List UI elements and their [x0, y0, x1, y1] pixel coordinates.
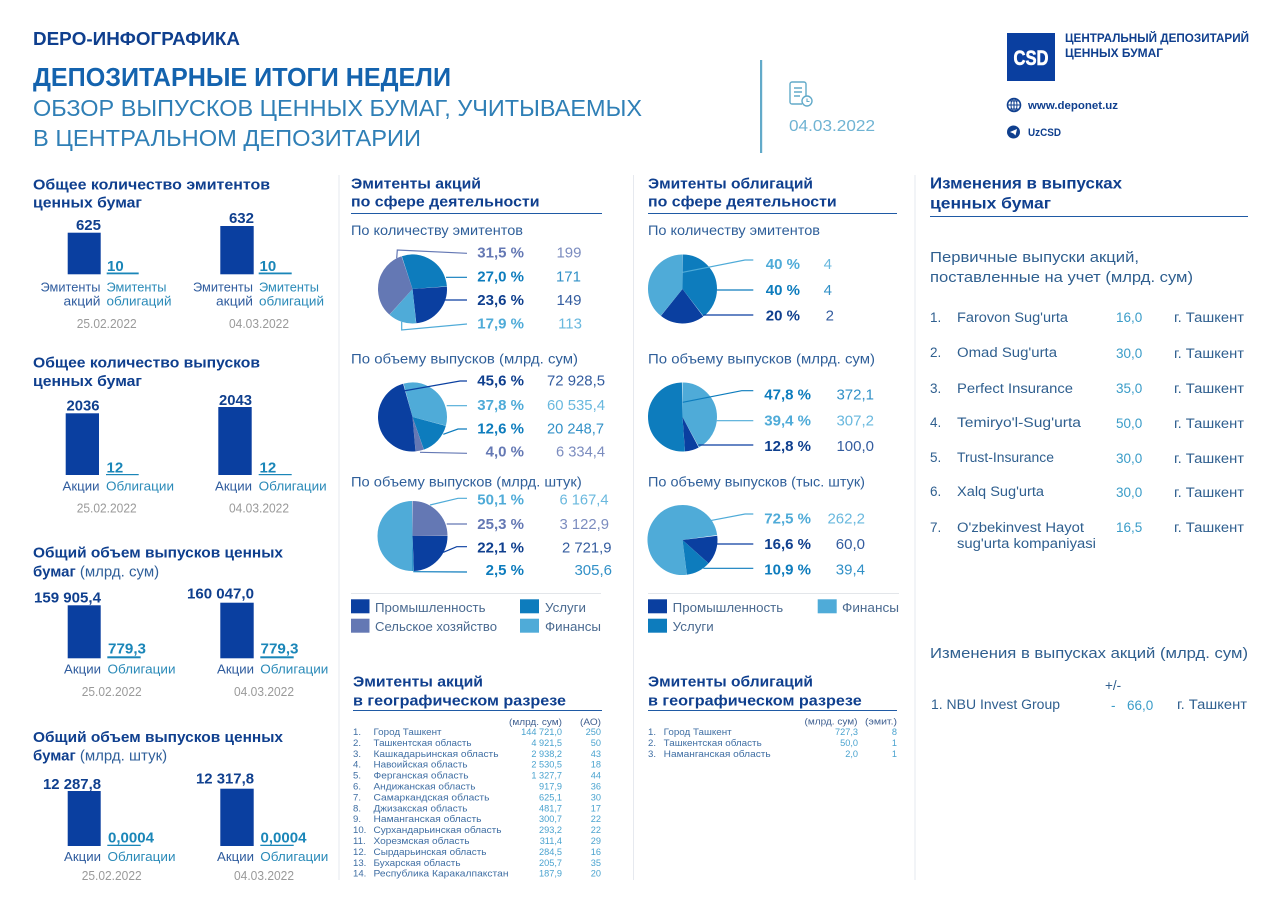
list: primary issues: sug'urta kompaniyasi: [957, 536, 1096, 551]
table: regions: Ташкентская область: [664, 738, 762, 749]
bar chart 25.02.2022: облигаций: [106, 294, 172, 309]
list: stock issue changes: +/-: [1105, 678, 1121, 693]
heading: [351, 175, 602, 214]
panel: changes in issues: [930, 176, 1248, 713]
values: bonds by issuer count: 20 %: [766, 308, 800, 325]
bar chart 25.02.2022: Акции: [64, 661, 101, 676]
table: regions: 1.: [353, 727, 361, 738]
table: regions: Кашкадарьинская область: [374, 749, 498, 760]
subheading: by issuer count: По количеству эмитентов: [648, 222, 820, 238]
bar chart 04.03.2022: 0,0004: [260, 829, 307, 846]
values: stocks by volume in sum: 6 334,4: [556, 444, 605, 461]
header: title block: ДЕПОЗИТАРНЫЕ ИТОГИ НЕДЕЛИ: [33, 62, 451, 92]
list: stock issue changes: [931, 678, 1247, 713]
bar chart 25.02.2022: Облигации: [108, 849, 176, 864]
table: regions: Город Ташкент: [374, 727, 442, 738]
bar chart 25.02.2022: 25.02.2022: [77, 316, 137, 331]
table: regions: 300,7: [539, 814, 562, 824]
heading: Эмитенты акций: [351, 175, 481, 192]
bar chart 04.03.2022: 04.03.2022: [234, 684, 294, 699]
website link: [1008, 98, 1119, 112]
bar chart 25.02.2022: Эмитенты: [40, 280, 100, 295]
list: primary issues: г. Ташкент: [1174, 381, 1244, 396]
values: bonds by volume in pieces: 60,0: [836, 536, 865, 553]
list: primary issues: [930, 310, 1244, 551]
bar chart 04.03.2022: акций: [216, 294, 253, 309]
bar chart 04.03.2022: Акции: [217, 849, 254, 864]
list: primary issues: Xalq Sug'urta: [957, 484, 1045, 499]
header: title block: [33, 29, 642, 151]
table: regions: 8: [892, 727, 897, 737]
table: regions: 3.: [353, 749, 361, 760]
table: regions: 205,7: [539, 858, 562, 868]
bar chart 25.02.2022: 25.02.2022: [82, 868, 142, 883]
values: bonds by issuer count: 4: [824, 282, 832, 299]
values: bonds by volume in sum: 12,8 %: [764, 438, 811, 455]
list: primary issues: 35,0: [1116, 381, 1142, 396]
table: regions: 481,7: [539, 803, 562, 813]
bar chart 25.02.2022: 25.02.2022: [82, 684, 142, 699]
heading: Эмитенты облигаций: [648, 674, 813, 691]
list: primary issues: г. Ташкент: [1174, 346, 1244, 361]
values: stocks by issuer count: 23,6 %: [477, 292, 524, 309]
heading: [930, 176, 1248, 217]
table: regions: 50,0: [840, 738, 858, 748]
heading: ценных бумаг: [33, 373, 142, 390]
table: regions: (млрд. сум): [804, 716, 858, 727]
values: stocks by volume in pieces: 3 122,9: [560, 516, 609, 533]
bar chart 25.02.2022: [43, 776, 176, 883]
telegram link: [1007, 126, 1061, 139]
heading: Общее количество выпусков: [33, 354, 260, 371]
panel: volume in bln pieces: [33, 729, 328, 883]
bar chart 04.03.2022: Облигации: [260, 661, 328, 676]
bar chart 25.02.2022: 12 287,8: [43, 776, 101, 793]
bar chart 25.02.2022: [62, 398, 174, 516]
values: bonds by volume in pieces: 39,4: [836, 561, 865, 578]
panel: stock issuers by sector: [351, 175, 612, 634]
telegram link: UzCSD: [1028, 127, 1061, 139]
subheading: stock issue changes: Изменения в выпусках акций (млрд. сум): [930, 645, 1248, 662]
bar chart 25.02.2022: 10: [107, 258, 124, 275]
legend: bonds: [648, 599, 899, 634]
bar chart 04.03.2022: Акции: [215, 479, 252, 494]
values: stocks by volume in pieces: 50,1 %: [477, 491, 524, 508]
list: primary issues: 2.: [930, 345, 941, 360]
logo: CSD: CSD: [1014, 47, 1048, 70]
panel: total issuers: [33, 176, 324, 331]
list: primary issues: г. Ташкент: [1174, 416, 1244, 431]
bar chart 04.03.2022: 632: [229, 210, 254, 227]
legend: stocks: Сельское хозяйство: [375, 619, 497, 634]
bar chart 25.02.2022: Эмитенты: [106, 280, 166, 295]
bar chart 04.03.2022: [193, 210, 324, 331]
table: regions: 16: [591, 847, 601, 857]
table: regions: 311,4: [540, 836, 562, 846]
table: regions: 10.: [353, 825, 366, 836]
heading: [648, 674, 897, 711]
header: title block: В ЦЕНТРАЛЬНОМ ДЕПОЗИТАРИИ: [33, 125, 421, 151]
table: regions: Наманганская область: [664, 749, 771, 760]
subheading: primary issues: [930, 249, 1193, 286]
heading: Эмитенты акций: [353, 674, 483, 691]
table: regions: 1 327,7: [531, 771, 562, 781]
heading: [33, 729, 284, 765]
table: regions: 13.: [353, 858, 366, 869]
bar chart 25.02.2022: 2036: [66, 398, 100, 415]
subheading: by issuer count: По количеству эмитентов: [351, 222, 523, 238]
subheading: by volume in sum: По объему выпусков (млрд. сум): [648, 350, 875, 366]
table: regions: [353, 717, 601, 880]
bar chart 25.02.2022: 12: [106, 460, 123, 476]
bar chart 04.03.2022: Эмитенты: [259, 280, 319, 295]
table: regions: 187,9: [539, 869, 562, 879]
bar chart 04.03.2022: 04.03.2022: [234, 868, 294, 883]
values: stocks by volume in pieces: 2 721,9: [562, 539, 612, 556]
bar chart 25.02.2022: Облигации: [108, 661, 176, 676]
list: stock issue changes: 66,0: [1127, 698, 1153, 713]
bar chart 25.02.2022: 0,0004: [108, 829, 155, 846]
table: regions: 17: [591, 803, 601, 813]
bar chart 04.03.2022: 12 317,8: [196, 770, 254, 787]
table: regions: Хорезмская область: [374, 836, 470, 847]
table: regions: 22: [591, 825, 601, 835]
table: regions: 36: [591, 782, 601, 792]
heading: Эмитенты облигаций: [648, 175, 813, 192]
values: bonds by volume in pieces: [764, 510, 865, 578]
header: date block: 04.03.2022: [789, 118, 875, 135]
organisation name: [1065, 30, 1249, 60]
list: primary issues: 30,0: [1116, 485, 1142, 500]
table: regions: 12.: [353, 847, 366, 858]
bar chart 25.02.2022: [34, 590, 176, 699]
table: regions: Сурхандарьинская область: [374, 825, 502, 836]
header: date block: [760, 60, 875, 153]
values: stocks by volume in pieces: [477, 491, 612, 579]
table: regions: Джизакская область: [374, 803, 468, 814]
legend: bonds: Промышленность: [673, 600, 783, 615]
values: stocks by issuer count: 199: [556, 244, 582, 261]
table: regions: 14.: [353, 869, 366, 880]
pie chart: bonds by volume in pieces: [658, 514, 753, 568]
panel: volume in bln sum: [33, 545, 328, 699]
values: stocks by volume in sum: 12,6 %: [477, 420, 524, 437]
table: regions: 20: [591, 869, 601, 879]
bar chart 04.03.2022: Облигации: [260, 849, 328, 864]
bar chart 25.02.2022: Облигации: [106, 479, 174, 494]
bar chart 25.02.2022: Акции: [62, 479, 100, 494]
bar chart 04.03.2022: 779,3: [260, 640, 298, 657]
list: stock issue changes: 1. NBU Invest Group: [931, 697, 1060, 712]
legend: bonds: Финансы: [842, 600, 899, 615]
bar chart 04.03.2022: [215, 392, 327, 516]
values: stocks by issuer count: 27,0 %: [477, 269, 524, 286]
bar chart 25.02.2022: 625: [76, 217, 101, 234]
legend: stocks: Промышленность: [375, 600, 486, 615]
table: regions: 2 530,5: [531, 760, 562, 770]
bar chart 04.03.2022: 04.03.2022: [229, 316, 289, 331]
values: stocks by issuer count: 149: [556, 292, 582, 309]
values: bonds by issuer count: 40 %: [766, 282, 800, 299]
list: primary issues: Temiryo'l-Sug'urta: [957, 415, 1082, 430]
list: primary issues: Omad Sug'urta: [957, 345, 1058, 360]
values: stocks by volume in pieces: 22,1 %: [477, 539, 524, 556]
values: bonds by issuer count: 4: [824, 256, 832, 273]
values: bonds by volume in sum: 100,0: [836, 438, 874, 455]
values: bonds by volume in pieces: 262,2: [827, 510, 865, 527]
bar chart 25.02.2022: 159 905,4: [34, 590, 102, 607]
table: regions: 2.: [353, 738, 361, 749]
table: regions: 3.: [648, 749, 656, 760]
values: stocks by issuer count: 17,9 %: [477, 315, 524, 332]
subheading: by volume in sum: По объему выпусков (млрд. сум): [351, 350, 578, 366]
subheading: primary issues: поставленные на учет (млрд. сум): [930, 269, 1193, 286]
table: regions: 144 721,0: [521, 727, 562, 737]
subheading: primary issues: Первичные выпуски акций,: [930, 249, 1139, 266]
values: stocks by volume in pieces: 25,3 %: [477, 516, 524, 533]
table: regions: 9.: [353, 814, 361, 825]
values: stocks by issuer count: 171: [556, 269, 581, 286]
organisation name: ЦЕННЫХ БУМАГ: [1065, 46, 1163, 60]
list: primary issues: 16,5: [1116, 520, 1142, 535]
table: regions: 2,0: [845, 749, 858, 759]
bar chart 04.03.2022: 10: [260, 258, 276, 275]
values: stocks by issuer count: 113: [558, 315, 582, 332]
table: regions: 44: [591, 771, 601, 781]
list: primary issues: г. Ташкент: [1174, 310, 1244, 325]
pie chart: stocks by volume in pieces: [394, 498, 467, 572]
table: regions: 4 921,5: [531, 738, 562, 748]
panel: bond issuers by sector: [648, 175, 899, 634]
values: bonds by volume in sum: 39,4 %: [764, 413, 811, 430]
table: regions: [648, 716, 897, 760]
table: regions: 7.: [353, 792, 361, 803]
values: stocks by volume in pieces: 6 167,4: [560, 491, 608, 508]
table: regions: (млрд. сум): [509, 717, 562, 728]
subheading: by volume in pieces: По объему выпусков (млрд. штук): [351, 474, 582, 490]
list: primary issues: Perfect Insurance: [957, 381, 1073, 396]
bar chart 04.03.2022: 2043: [219, 392, 252, 409]
table: regions: 18: [591, 760, 601, 770]
bar chart 04.03.2022: Эмитенты: [193, 280, 253, 295]
values: stocks by volume in sum: 4,0 %: [486, 444, 524, 461]
table: regions: Бухарская область: [374, 858, 460, 869]
table: regions: 5.: [353, 771, 361, 782]
values: stocks by volume in pieces: 2,5 %: [486, 562, 524, 579]
values: bonds by volume in pieces: 16,6 %: [764, 536, 811, 553]
list: primary issues: 30,0: [1116, 451, 1142, 466]
bar chart 04.03.2022: Акции: [217, 661, 254, 676]
table: regions: Ташкентская область: [374, 738, 472, 749]
panel: stock issuers by region: [353, 674, 602, 880]
heading: Общий объем выпусков ценных: [33, 545, 284, 562]
panel: total issues: [33, 354, 327, 516]
heading: Общий объем выпусков ценных: [33, 729, 284, 746]
pie chart: bonds by volume in sum: [659, 391, 753, 445]
table: regions: 250: [586, 727, 601, 737]
bar chart 04.03.2022: Облигации: [259, 479, 327, 494]
list: stock issue changes: -: [1111, 698, 1116, 713]
legend: bonds: Услуги: [673, 619, 714, 634]
values: bonds by volume in pieces: 10,9 %: [764, 561, 811, 578]
table: regions: 2.: [648, 738, 656, 749]
list: primary issues: 3.: [930, 381, 941, 396]
table: regions: Сырдарьинская область: [374, 847, 486, 858]
heading: Общее количество эмитентов: [33, 176, 270, 193]
heading: в географическом разрезе: [648, 693, 862, 710]
heading: в географическом разрезе: [353, 693, 566, 710]
list: primary issues: 1.: [930, 310, 941, 325]
heading: [33, 354, 260, 390]
table: regions: 1.: [648, 727, 656, 738]
list: primary issues: 50,0: [1116, 416, 1142, 431]
values: bonds by volume in sum: 372,1: [836, 386, 874, 403]
heading: по сфере деятельности: [351, 194, 540, 211]
list: primary issues: 4.: [930, 415, 941, 430]
logo: CSD: [1007, 33, 1055, 81]
bar chart 25.02.2022: [40, 217, 172, 331]
bar chart 25.02.2022: Акции: [64, 849, 101, 864]
table: regions: 11.: [353, 836, 366, 847]
list: primary issues: 16,0: [1116, 310, 1142, 325]
bar chart 25.02.2022: акций: [64, 294, 100, 309]
list: primary issues: 7.: [930, 520, 941, 535]
list: primary issues: г. Ташкент: [1174, 520, 1244, 535]
pie chart: stocks by volume in sum: [391, 381, 467, 453]
bar chart 04.03.2022: 12: [260, 460, 276, 476]
list: primary issues: г. Ташкент: [1174, 451, 1244, 466]
values: bonds by volume in sum: 307,2: [836, 413, 874, 430]
list: primary issues: 30,0: [1116, 346, 1142, 361]
heading: [33, 545, 284, 581]
table: regions: 30: [591, 792, 601, 802]
legend: stocks: Услуги: [545, 600, 586, 615]
website link: www.deponet.uz: [1027, 100, 1119, 112]
pie chart: bonds by issuer count: [658, 260, 753, 315]
bar chart 04.03.2022: 160 047,0: [187, 585, 254, 602]
table: regions: (эмит.): [865, 716, 897, 727]
list: primary issues: O'zbekinvest Hayot: [957, 520, 1084, 535]
subheading: by volume in pieces: По объему выпусков (тыс. штук): [648, 474, 865, 490]
heading: [648, 175, 897, 214]
values: stocks by volume in sum: 37,8 %: [477, 397, 524, 414]
bar chart 25.02.2022: 25.02.2022: [77, 501, 137, 516]
organisation name: ЦЕНТРАЛЬНЫЙ ДЕПОЗИТАРИЙ: [1065, 30, 1249, 45]
values: stocks by volume in sum: 60 535,4: [547, 397, 605, 414]
table: regions: 727,3: [835, 727, 858, 737]
table: regions: 22: [591, 814, 601, 824]
values: stocks by volume in pieces: 305,6: [574, 562, 612, 579]
legend: stocks: [351, 599, 601, 634]
heading: ценных бумаг: [33, 195, 142, 212]
values: bonds by volume in sum: [764, 386, 874, 455]
table: regions: 6.: [353, 782, 361, 792]
table: regions: 8.: [353, 803, 361, 814]
values: bonds by volume in sum: 47,8 %: [764, 386, 811, 403]
list: primary issues: 6.: [930, 484, 941, 499]
values: bonds by issuer count: 40 %: [766, 256, 800, 273]
table: regions: 43: [591, 749, 601, 759]
list: primary issues: Farovon Sug'urta: [957, 310, 1069, 325]
list: stock issue changes: г. Ташкент: [1177, 697, 1247, 712]
table: regions: (АО): [580, 717, 601, 728]
heading: [353, 674, 602, 711]
heading: [33, 176, 270, 212]
values: bonds by issuer count: [766, 256, 834, 325]
table: regions: 4.: [353, 760, 361, 771]
table: regions: 284,5: [539, 847, 562, 857]
heading: по сфере деятельности: [648, 194, 837, 211]
table: regions: 2 938,2: [531, 749, 562, 759]
legend: stocks: Финансы: [545, 619, 601, 634]
pie chart: stocks by issuer count: [388, 250, 467, 330]
table: regions: Навоийская область: [374, 760, 468, 771]
table: regions: 293,2: [539, 825, 562, 835]
table: regions: Город Ташкент: [664, 727, 732, 738]
bar chart 25.02.2022: 779,3: [108, 640, 146, 657]
panel: bond issuers by region: [648, 674, 897, 760]
bar chart 04.03.2022: облигаций: [259, 294, 324, 309]
values: stocks by volume in sum: 20 248,7: [547, 420, 604, 437]
table: regions: Самаркандская область: [374, 792, 490, 803]
heading: бумаг (млрд. штук): [33, 748, 167, 765]
table: regions: 1: [892, 738, 897, 748]
table: regions: Наманганская область: [374, 814, 482, 825]
heading: бумаг (млрд. сум): [33, 564, 159, 581]
heading: Изменения в выпусках: [930, 176, 1122, 192]
list: primary issues: Trust-Insurance: [957, 450, 1054, 465]
bar chart 04.03.2022: 04.03.2022: [229, 501, 289, 516]
table: regions: 917,9: [539, 782, 562, 792]
values: stocks by volume in sum: 72 928,5: [547, 373, 605, 390]
heading: ценных бумаг: [930, 196, 1051, 212]
header: title block: ОБЗОР ВЫПУСКОВ ЦЕННЫХ БУМАГ, УЧИТЫВАЕМЫХ: [33, 95, 642, 121]
values: bonds by volume in pieces: 72,5 %: [764, 510, 811, 527]
values: stocks by volume in sum: [477, 373, 605, 461]
list: primary issues: 5.: [930, 450, 941, 465]
values: bonds by issuer count: 2: [826, 308, 834, 325]
values: stocks by issuer count: 31,5 %: [477, 244, 524, 261]
table: regions: 35: [591, 858, 601, 868]
bar chart 04.03.2022: [196, 770, 328, 883]
bar chart 04.03.2022: [187, 585, 328, 699]
table: regions: Ферганская область: [374, 771, 468, 782]
table: regions: 1: [892, 749, 897, 759]
header: title block: DEPO-ИНФОГРАФИКА: [33, 29, 240, 49]
values: stocks by volume in sum: 45,6 %: [477, 373, 524, 390]
table: regions: 625,1: [539, 792, 562, 802]
list: primary issues: г. Ташкент: [1174, 485, 1244, 500]
table: regions: Андижанская область: [374, 782, 476, 792]
table: regions: 29: [591, 836, 601, 846]
table: regions: 50: [591, 738, 601, 748]
values: stocks by issuer count: [477, 244, 582, 332]
table: regions: Республика Каракалпакстан: [374, 869, 508, 880]
